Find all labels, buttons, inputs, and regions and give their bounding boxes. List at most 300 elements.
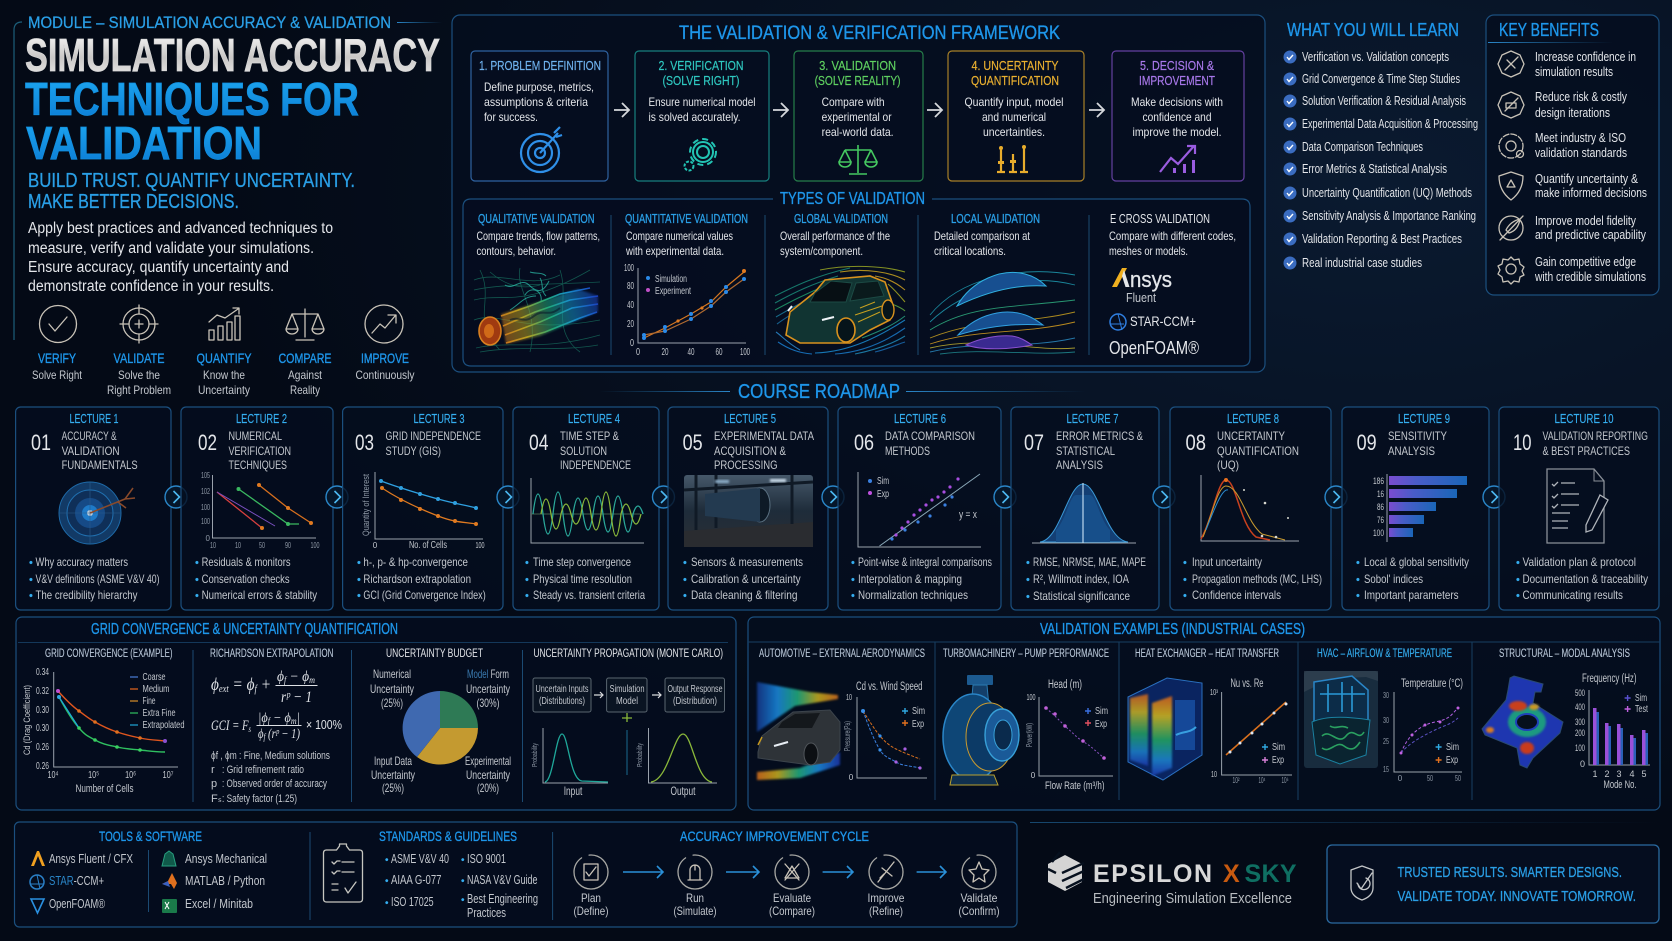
benefit: reduce risk xyxy=(1498,90,1628,120)
chart: grid convergence: 10⁵ xyxy=(88,770,99,781)
logo: epsilon xsky: EPSILON xyxy=(1093,860,1212,888)
diagram: monte carlo propagation: Input xyxy=(564,786,583,798)
chart: modal frequency: 400 xyxy=(1575,702,1585,712)
lecture 8 card: Confidence intervals xyxy=(1192,588,1281,602)
chart: simulation vs experiment: 100 xyxy=(740,347,750,358)
lecture 4 card: LECTURE 4 xyxy=(568,412,620,426)
tools and software: OpenFOAM® xyxy=(49,896,105,911)
chart: grid independence: 0 xyxy=(373,541,378,550)
lecture 7 card: ERROR METRICS & xyxy=(1056,429,1143,443)
chart: residual convergence: 0 xyxy=(206,534,211,543)
arrow xyxy=(927,103,942,117)
lecture 7 card: 07 xyxy=(1024,430,1044,455)
lecture 7 card: • xyxy=(1026,557,1030,569)
chart: uncertainty budget pie: (25%) xyxy=(381,696,403,710)
lecture 5 card: Calibration & uncertainty xyxy=(691,572,801,586)
lecture 2 card: Conservation checks xyxy=(202,572,290,586)
chart: modal frequency: Test xyxy=(1635,704,1648,715)
step 4: uncertainty quantification: uncertainties. xyxy=(983,125,1045,139)
standards and guidelines: STANDARDS & GUIDELINES xyxy=(379,828,517,844)
logo: ansys fluent xyxy=(1112,267,1172,305)
learning list: Real industrial case studies xyxy=(1302,256,1422,270)
chart: nu vs re: Sim xyxy=(1272,741,1285,753)
cycle step: plan xyxy=(574,855,608,918)
case: automotive xyxy=(757,648,927,782)
chart: uncertainty budget pie: Numerical xyxy=(373,667,411,681)
chart: cd vs wind speed: Cd vs. Wind Speed xyxy=(856,681,922,693)
chart: head vs flow rate: Exp xyxy=(1095,718,1107,730)
chart: uncertainty budget pie: Uncertainty xyxy=(371,768,415,782)
chart: sensitivity bars: 86 xyxy=(1377,502,1384,512)
chart: simulation vs experiment: 40 xyxy=(688,347,695,358)
chart: nu vs re: 10³ xyxy=(1210,688,1218,697)
lecture 5 card: • xyxy=(683,590,687,602)
step 5: decision and improvement: Make decisions with xyxy=(1131,95,1223,109)
intro paragraph: Ensure accuracy, quantify uncertainty and xyxy=(28,259,289,276)
tools and software: TOOLS & SOFTWARE xyxy=(99,828,202,844)
formula: richardson extrapolation: GCI = F xyxy=(211,718,264,734)
chart: grid convergence: GRID CONVERGENCE (EXAMPLE) xyxy=(45,648,173,660)
icon: shield check xyxy=(1351,866,1373,900)
types heading: TYPES OF VALIDATION xyxy=(780,188,925,208)
lecture 3 card: • xyxy=(357,590,361,602)
lecture 9 card: • xyxy=(1356,590,1360,602)
title: SIMULATION ACCURACY xyxy=(25,29,440,81)
step 1: problem definition: assumptions & criteria xyxy=(484,95,588,109)
chart: grid independence: No. of Cells xyxy=(409,540,447,551)
cycle step: evaluate: Evaluate xyxy=(773,891,811,905)
lecture 8 card: 08 xyxy=(1186,430,1206,455)
case: heat exchanger xyxy=(1128,648,1292,785)
type: qualitative validation: Compare trends, flow patterns, xyxy=(476,229,600,243)
logo: openfoam: OpenFOAM® xyxy=(1109,338,1199,358)
chart: sensitivity bars: 16 xyxy=(1377,489,1384,499)
benefit: standards xyxy=(1499,131,1627,160)
type: cross validation: E CROSS VALIDATION xyxy=(1110,212,1210,226)
pillar: improve: IMPROVE xyxy=(361,350,409,366)
benefit: competitive edge xyxy=(1498,255,1646,284)
formula: richardson extrapolation: r xyxy=(211,764,215,776)
framework heading: THE VALIDATION & VERIFICATION FRAMEWORK xyxy=(679,23,1060,44)
formula: richardson extrapolation: f xyxy=(268,716,271,726)
lecture 3 card: GCI (Grid Convergence Index) xyxy=(363,588,486,602)
step 3: validation xyxy=(794,51,923,181)
lecture 8 card: • xyxy=(1183,590,1187,602)
lecture 1 card: V&V definitions (ASME V&V 40) xyxy=(36,572,160,586)
type: local validation xyxy=(930,212,1075,354)
lecture 6 card: Interpolation & mapping xyxy=(858,572,962,586)
lecture 1 card: Why accuracy matters xyxy=(36,555,128,569)
lecture 7 card xyxy=(1011,407,1159,610)
lecture 6 card: • xyxy=(851,574,855,586)
type: global validation: system/component. xyxy=(780,244,863,258)
module label: MODULE – SIMULATION ACCURACY & VALIDATION xyxy=(28,13,391,32)
chart: grid convergence: 0.30 xyxy=(36,705,49,716)
chart: residual convergence: 100 xyxy=(201,503,210,512)
lecture 10 card: & BEST PRACTICES xyxy=(1542,444,1630,458)
lecture 2 card xyxy=(181,407,333,610)
case: heat exchanger: HEAT EXCHANGER – HEAT TRANSFER xyxy=(1135,648,1279,660)
chart: temperature xyxy=(1383,678,1463,783)
case: hvac xyxy=(1304,648,1463,783)
chart: grid convergence: Cd (Drag Coefficient) xyxy=(22,685,33,755)
chart: uncertainty budget pie xyxy=(370,646,511,795)
image: car with streamlines xyxy=(775,266,905,354)
formula: richardson extrapolation: Fₛ xyxy=(211,793,222,805)
cycle step: validate: Validate xyxy=(960,891,998,905)
chart: cd vs wind speed xyxy=(843,681,927,782)
heading: course roadmap: COURSE ROADMAP xyxy=(738,381,900,403)
benefit: competitive edge: with credible simulations xyxy=(1534,270,1646,284)
pillar: validate: Right Problem xyxy=(107,383,171,397)
type: cross validation xyxy=(1109,212,1236,358)
formula: richardson extrapolation: m xyxy=(291,716,297,726)
lecture 6 card: METHODS xyxy=(885,444,930,458)
chart: residual convergence: 100 xyxy=(310,541,320,550)
chart: normal distribution xyxy=(1032,483,1136,543)
tagline: MAKE BETTER DECISIONS. xyxy=(28,191,239,213)
chevron xyxy=(994,486,1016,508)
formula: richardson extrapolation: ϕ xyxy=(211,674,220,694)
chart: grid convergence: Extrapolated xyxy=(142,720,184,731)
lecture 6 card: 06 xyxy=(854,430,874,455)
step 4: uncertainty quantification: 4. UNCERTAINTY xyxy=(972,58,1059,73)
chart: modal frequency: 4 xyxy=(1629,769,1635,779)
arrow xyxy=(823,866,853,878)
cycle step: plan: (Define) xyxy=(574,904,608,918)
type: global validation: Overall performance of the xyxy=(780,229,890,243)
image: heat exchanger xyxy=(1128,678,1202,780)
tools and software: Ansys Fluent / CFX xyxy=(49,851,133,866)
chart: modal frequency: 1 xyxy=(1592,769,1598,779)
type: global validation: GLOBAL VALIDATION xyxy=(794,212,888,226)
logo: epsilon xsky: Engineering Simulation Excellence xyxy=(1093,890,1292,907)
standards and guidelines: NASA V&V Guide xyxy=(467,873,538,887)
logo: ansys fluent: nsys xyxy=(1130,267,1172,292)
lecture 3 card: STUDY (GIS) xyxy=(386,444,441,458)
benefit: fidelity: Improve model fidelity xyxy=(1535,214,1637,228)
lecture 8 card: • xyxy=(1183,557,1187,569)
chart: uncertainty budget pie: Uncertainty xyxy=(466,682,510,696)
intro paragraph: Apply best practices and advanced techniques to xyxy=(28,220,333,237)
lecture 3 card: • xyxy=(357,574,361,586)
formula: richardson extrapolation: |ϕ xyxy=(258,711,269,726)
chart: uncertainty budget pie: Uncertainty xyxy=(466,768,510,782)
lecture 6 card xyxy=(838,407,1001,610)
chart: modal frequency: 2 xyxy=(1604,769,1610,779)
cycle step: run: Run xyxy=(686,891,704,905)
chevron xyxy=(165,486,187,508)
type: cross validation: Compare with different codes, xyxy=(1109,229,1236,243)
lecture 3 card: 03 xyxy=(355,430,374,455)
type: quantitative validation: QUANTITATIVE VALIDATION xyxy=(625,212,748,226)
chart: simulation vs experiment: 40 xyxy=(627,300,634,311)
benefit: confidence: Increase confidence in xyxy=(1535,50,1636,64)
chart: temperature: 50 xyxy=(1455,774,1461,783)
benefit: fidelity xyxy=(1499,214,1647,242)
step 5: decision and improvement: 5. DECISION & xyxy=(1140,58,1214,73)
chart: modal frequency: 500 xyxy=(1575,688,1585,698)
lecture 1 card: The credibility hierarchy xyxy=(36,588,138,602)
chart: uncertainty budget pie: (30%) xyxy=(476,696,500,710)
chart: sensitivity bars xyxy=(1373,474,1467,542)
pillar: quantify: QUANTIFY xyxy=(196,350,252,366)
formula: richardson extrapolation: : Observed order of accuracy xyxy=(222,778,327,790)
formula: richardson extrapolation: × 100% xyxy=(306,717,342,732)
chart: cd vs wind speed: Exp xyxy=(912,718,924,730)
chart: grid convergence: Coarse xyxy=(142,672,166,683)
chart: residual convergence: 10 xyxy=(210,541,216,550)
type: quantitative validation: Compare numerical values xyxy=(626,229,733,243)
chart: grid convergence xyxy=(22,648,184,795)
lecture 1 card: • xyxy=(29,574,33,586)
chart: nu vs re: 10² xyxy=(1232,776,1240,785)
step 2: verification xyxy=(635,51,769,181)
tools and software: Excel / Minitab xyxy=(185,896,253,911)
chevron xyxy=(652,486,674,508)
pillar: compare: Reality xyxy=(290,383,320,397)
chart: sensitivity bars: 100 xyxy=(1373,528,1384,538)
arrow xyxy=(614,103,629,117)
standards and guidelines: • xyxy=(385,898,389,909)
lecture 6 card: • xyxy=(851,557,855,569)
chart: temperature: 0 xyxy=(1398,774,1403,783)
chart: residual convergence: 50 xyxy=(259,541,265,550)
diagram: monte carlo propagation: Model xyxy=(616,696,638,707)
lecture 2 card: Residuals & monitors xyxy=(202,555,291,569)
logo: ansys fluent: Fluent xyxy=(1126,290,1156,305)
lecture 10 card: • xyxy=(1516,590,1520,602)
pillar: validate xyxy=(107,305,171,397)
cycle step: run: (Simulate) xyxy=(674,904,716,918)
step 1: problem definition xyxy=(471,51,608,181)
tools and software: MATLAB / Python xyxy=(185,873,265,888)
diagram: monte carlo propagation xyxy=(532,648,724,798)
chart: head vs flow rate: Head (m) xyxy=(1048,679,1082,691)
pillar: improve: Continuously xyxy=(356,368,414,382)
chart: parity plot: y = x xyxy=(959,509,977,521)
chart: simulation vs experiment: Simulation xyxy=(655,274,687,285)
cycle step: run xyxy=(674,855,716,918)
chart: head vs flow rate: 100 xyxy=(1026,693,1036,702)
diagram: monte carlo propagation: Simulation xyxy=(610,684,644,695)
chart: parity plot xyxy=(858,472,981,547)
learning list: Verification vs. Validation concepts xyxy=(1302,50,1449,64)
chart: temperature: 50 xyxy=(1427,774,1433,783)
lecture 9 card: • xyxy=(1356,557,1360,569)
formula: richardson extrapolation: m xyxy=(309,675,315,685)
chart: nu vs re: Nu vs. Re xyxy=(1230,678,1264,690)
chart: modal frequency: Sim xyxy=(1635,693,1647,704)
pillar: compare xyxy=(278,309,332,397)
lecture 5 card: LECTURE 5 xyxy=(724,412,776,426)
step 4: uncertainty quantification: QUANTIFICATION xyxy=(971,73,1059,88)
type: quantitative validation xyxy=(624,212,750,358)
lecture 4 card: INDEPENDENCE xyxy=(560,458,631,472)
panel: types of validation xyxy=(463,188,1250,366)
type: quantitative validation: with experimental data. xyxy=(625,244,724,258)
lecture 1 card: 01 xyxy=(31,430,51,455)
formula: richardson extrapolation: f xyxy=(263,732,267,742)
learning list: Validation Reporting & Best Practices xyxy=(1302,232,1462,246)
chart: uncertainty budget pie: (20%) xyxy=(477,781,499,795)
logo: epsilon xsky xyxy=(1048,852,1297,907)
step 5: decision and improvement: IMPROVEMENT xyxy=(1139,73,1215,88)
chart: cd vs wind speed: Pressure(Pa) xyxy=(843,721,852,751)
chart: modal frequency: Mode No. xyxy=(1604,779,1636,791)
pillar: improve xyxy=(356,305,414,382)
section heading: VALIDATION EXAMPLES (INDUSTRIAL CASES) xyxy=(1040,621,1305,638)
image: car aero xyxy=(757,682,840,780)
chart: simulation vs experiment: 60 xyxy=(716,347,723,358)
lecture 4 card: Physical time resolution xyxy=(533,572,632,586)
benefit: reduce risk: Reduce risk & costly xyxy=(1535,90,1628,104)
lecture 7 card: • xyxy=(1026,591,1030,603)
chevron xyxy=(1483,486,1505,508)
benefit: reduce risk: design iterations xyxy=(1535,106,1610,120)
lecture 2 card: Numerical errors & stability xyxy=(202,588,317,602)
lecture 7 card: R², Willmott index, IOA xyxy=(1033,572,1129,586)
chart: residual convergence: 90 xyxy=(285,541,291,550)
lecture 5 card: Sensors & measurements xyxy=(691,555,803,569)
arrow xyxy=(917,866,946,878)
diagram: monte carlo propagation: Uncertain Inputs xyxy=(536,684,588,695)
standards and guidelines xyxy=(324,828,538,920)
lecture 2 card: • xyxy=(195,574,199,586)
image: airfoil streamlines xyxy=(930,272,1075,354)
learn heading: WHAT YOU WILL LEARN xyxy=(1287,20,1459,40)
standards and guidelines: Best Engineering xyxy=(467,892,538,906)
chart: parity plot: Sim xyxy=(877,476,889,487)
lecture 10 card: • xyxy=(1516,574,1520,586)
chart: simulation vs experiment: 20 xyxy=(662,347,669,358)
lecture 4 card: Time step convergence xyxy=(533,555,631,569)
lecture 2 card: VERIFICATION xyxy=(228,444,291,458)
lecture 9 card: ANALYSIS xyxy=(1388,444,1435,458)
lecture 9 card: LECTURE 9 xyxy=(1398,412,1450,426)
lecture 5 card: • xyxy=(683,574,687,586)
step 2: verification: (SOLVE RIGHT) xyxy=(662,73,740,88)
lecture 8 card: QUANTIFICATION xyxy=(1217,444,1299,458)
chart: cd vs wind speed: 10 xyxy=(846,693,852,702)
logo: star-ccm+: STAR-CCM+ xyxy=(1130,313,1196,329)
formula: richardson extrapolation: + xyxy=(257,674,271,694)
chart: parity plot: Exp xyxy=(877,489,889,500)
benefit: confidence xyxy=(1498,50,1636,79)
lecture 10 card: Communicating results xyxy=(1522,588,1623,602)
chart: sensitivity bars: 76 xyxy=(1377,515,1384,525)
chart: grid convergence: Number of Cells xyxy=(76,783,134,795)
arrow xyxy=(726,866,759,878)
benefit: standards: Meet industry & ISO xyxy=(1535,131,1626,145)
callout: trusted results xyxy=(1327,845,1659,923)
chart: grid convergence: 10⁷ xyxy=(162,770,174,781)
chevron xyxy=(1325,486,1347,508)
icon: cube mark xyxy=(1048,852,1084,891)
pillar: quantify: Know the xyxy=(203,368,245,382)
icon: target with arrow xyxy=(59,482,135,544)
image: cfd flow field xyxy=(474,268,600,352)
panel: grid convergence and uncertainty quantification xyxy=(16,617,736,810)
standards and guidelines: AIAA G-077 xyxy=(391,873,442,887)
benefits heading: KEY BENEFITS xyxy=(1499,20,1599,40)
standards and guidelines: ISO 9001 xyxy=(467,852,506,866)
panel: validation examples xyxy=(748,617,1660,810)
diagram: monte carlo propagation: (Distribution) xyxy=(673,696,717,707)
lecture 2 card: NUMERICAL xyxy=(228,429,282,443)
chart: modal frequency: Frequency (Hz) xyxy=(1582,673,1637,685)
chart: simulation vs experiment xyxy=(624,263,750,358)
lecture 9 card xyxy=(1342,407,1489,610)
standards and guidelines: • xyxy=(461,876,465,887)
chart: grid convergence: 10⁴ xyxy=(48,770,58,781)
pillar: validate: Solve the xyxy=(118,368,160,382)
lecture 5 card: • xyxy=(683,557,687,569)
chart: uncertainty budget pie: UNCERTAINTY BUDGET xyxy=(386,646,483,660)
lecture 1 card: FUNDAMENTALS xyxy=(62,458,138,472)
diagram: monte carlo propagation: Output xyxy=(670,786,696,798)
type: qualitative validation xyxy=(474,212,600,352)
lecture 6 card: Point-wise & integral comparisons xyxy=(858,557,992,569)
step 5: decision and improvement: improve the model. xyxy=(1132,125,1222,139)
diagram: monte carlo propagation: Output Response xyxy=(668,684,723,695)
chart: grid convergence: 0.26 xyxy=(36,761,49,772)
learning list xyxy=(1302,50,1478,270)
lecture 5 card: ACQUISITION & xyxy=(714,444,786,458)
standards and guidelines: • xyxy=(385,855,389,866)
lecture 1 card: ACCURACY & xyxy=(62,429,117,443)
chart: grid convergence: Extra Fine xyxy=(142,708,176,719)
benefit: competitive edge: Gain competitive edge xyxy=(1535,255,1636,269)
image: pump xyxy=(943,675,1019,785)
lecture 8 card: UNCERTAINTY xyxy=(1217,429,1285,443)
chart: residual convergence: 102 xyxy=(201,487,210,496)
title: VALIDATION xyxy=(26,117,262,169)
chevron xyxy=(326,486,348,508)
pillar: verify xyxy=(32,306,83,382)
chart: uncertainty budget pie: Model Form xyxy=(467,667,509,681)
formula: richardson extrapolation: f xyxy=(255,684,258,695)
title xyxy=(25,29,440,169)
arrow xyxy=(773,103,788,117)
chart: transient signal xyxy=(531,478,644,543)
chart: temperature: Sim xyxy=(1446,741,1459,753)
lecture 4 card: • xyxy=(525,590,529,602)
lecture 7 card: ANALYSIS xyxy=(1056,458,1103,472)
cycle step: validate: (Confirm) xyxy=(958,904,1000,918)
lecture 7 card: • xyxy=(1026,574,1030,586)
lecture 5 card: PROCESSING xyxy=(714,458,778,472)
logo: epsilon xsky: SKY xyxy=(1244,860,1297,888)
chart: uncertainty budget pie: Uncertainty xyxy=(370,682,414,696)
lecture 2 card: LECTURE 2 xyxy=(236,412,287,426)
chart: grid independence: 100 xyxy=(476,541,485,550)
formula: richardson extrapolation: ext xyxy=(219,684,229,695)
intro paragraph xyxy=(28,220,333,295)
case: hvac: HVAC – AIRFLOW & TEMPERATURE xyxy=(1317,648,1452,660)
panel: validation and verification framework xyxy=(452,15,1265,372)
lecture 6 card: • xyxy=(851,590,855,602)
section heading: GRID CONVERGENCE & UNCERTAINTY QUANTIFICATION xyxy=(91,621,398,638)
image: wind tunnel lab xyxy=(684,475,813,547)
benefit: confidence: simulation results xyxy=(1535,65,1613,79)
learning list: Uncertainty Quantification (UQ) Methods xyxy=(1302,186,1472,200)
logo: star-ccm+ xyxy=(1110,313,1196,330)
pillar: quantify xyxy=(196,308,252,397)
panel: tools, standards and improvement cycle xyxy=(14,822,1017,927)
step 1: problem definition: Define purpose, metrics, xyxy=(484,80,594,94)
cycle step: improve: Improve xyxy=(868,891,905,905)
